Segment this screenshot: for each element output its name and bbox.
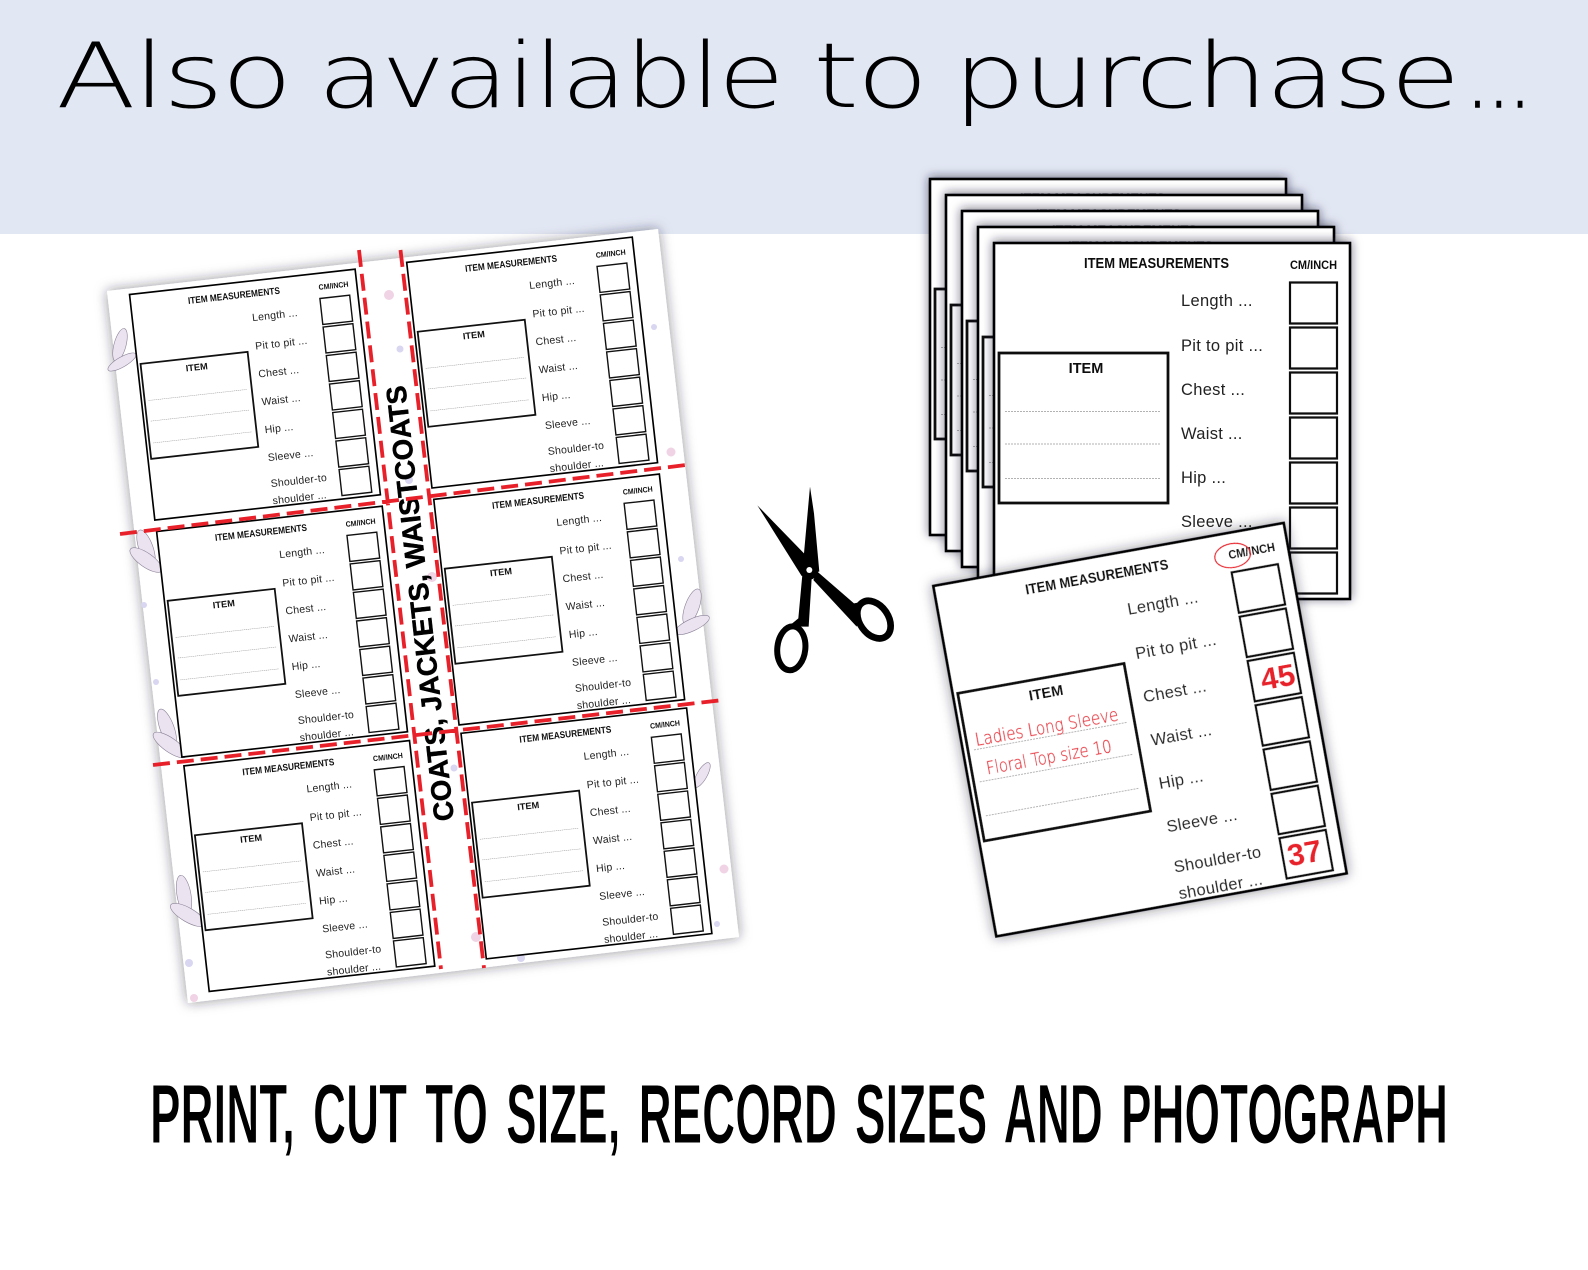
item box with handwriting: Ladies Long Sleeve [974, 705, 1120, 751]
unit heading circled in red [1213, 536, 1277, 571]
card 3: Length ... [279, 544, 325, 561]
card 5: Waist ... [315, 863, 356, 880]
card 1: ITEM MEASUREMENTS [187, 286, 281, 307]
card 3: shoulder ... [299, 726, 354, 744]
panel: printable sheet with six cards [106, 229, 739, 1003]
header band [0, 0, 1588, 234]
card 3 [157, 506, 408, 757]
red dashed cut lines [120, 250, 719, 969]
panel: stack of cards [930, 179, 1350, 599]
back card 4 [978, 227, 1334, 583]
value 45: 45 [1258, 657, 1298, 697]
card 6: Length ... [583, 746, 630, 763]
card 2: Length ... [529, 275, 575, 292]
card 2: CM/INCH [595, 248, 626, 260]
back card 1: ITEM MEASUREMENTS [1020, 190, 1165, 208]
card 3: Shoulder-to [297, 709, 355, 727]
card 4: ITEM [489, 566, 513, 578]
title: purchase [953, 24, 1458, 129]
title: ... [1466, 24, 1530, 129]
back card 1 [930, 179, 1286, 535]
back card 3 [962, 211, 1318, 567]
value 37: 37 [1284, 833, 1325, 873]
measurement labels: Hip ... [1157, 767, 1205, 793]
card 4: Length ... [556, 512, 603, 529]
card 4 [434, 474, 685, 725]
front stack card: Pit to pit ... [1181, 337, 1263, 355]
card 4: Waist ... [565, 597, 606, 613]
card 5: CM/INCH [373, 751, 403, 763]
card 1: Hip ... [264, 421, 294, 436]
card 3: CM/INCH [345, 517, 376, 529]
card 2: ITEM MEASUREMENTS [465, 254, 558, 275]
card 2: Hip ... [541, 389, 571, 404]
front stack card [994, 243, 1350, 599]
front stack card: Hip ... [1181, 469, 1226, 487]
card 3: ITEM MEASUREMENTS [215, 523, 308, 544]
card 2: Sleeve ... [544, 415, 591, 432]
card 5: Chest ... [312, 835, 354, 852]
unit heading circled in red: CM/INCH [1227, 540, 1276, 562]
back card 4: ITEM MEASUREMENTS [1068, 238, 1213, 256]
card 4: Sleeve ... [571, 652, 618, 669]
front stack card: ITEM MEASUREMENTS [1084, 255, 1229, 272]
measurement labels: Pit to pit ... [1134, 631, 1218, 663]
card 4: Pit to pit ... [559, 540, 612, 557]
front stack card: CM/INCH [1290, 258, 1337, 272]
card 6: Hip ... [596, 860, 626, 875]
card 6: Shoulder-to [602, 911, 659, 929]
title: Also [56, 24, 290, 129]
card 4: ITEM MEASUREMENTS [492, 491, 585, 512]
back card 2: ITEM MEASUREMENTS [1036, 206, 1181, 224]
panel: filled-in tilted card [933, 523, 1347, 936]
measurement labels: Shoulder-to [1172, 843, 1263, 877]
card 2: Chest ... [535, 332, 577, 348]
card 3: Waist ... [288, 629, 328, 645]
card 6: Waist ... [592, 831, 633, 847]
item box with handwriting [958, 663, 1151, 841]
card 4: shoulder ... [576, 694, 632, 712]
front stack card: Chest ... [1181, 381, 1245, 399]
card 5: Hip ... [318, 893, 348, 908]
card 4: Chest ... [562, 569, 604, 585]
card 1: shoulder ... [272, 489, 327, 507]
card 6: Sleeve ... [599, 886, 645, 903]
item box with handwriting: Floral Top size 10 [985, 737, 1113, 779]
card 6: Pit to pit ... [586, 774, 640, 791]
front stack card: Sleeve ... [1181, 513, 1253, 531]
card 6: CM/INCH [650, 718, 680, 731]
card 2: Pit to pit ... [532, 303, 585, 321]
measurement labels: Length ... [1126, 588, 1200, 619]
card heading: ITEM MEASUREMENTS [1024, 556, 1170, 599]
item box with handwriting: ITEM [1028, 683, 1065, 705]
card 5: Length ... [306, 778, 353, 795]
card 1 [130, 269, 380, 521]
card 2: shoulder ... [549, 457, 605, 475]
measurement boxes [1232, 564, 1333, 879]
card 6: ITEM [517, 800, 540, 812]
card 5: Shoulder-to [324, 943, 382, 962]
measurement labels: Waist ... [1150, 721, 1213, 750]
card 4: Shoulder-to [574, 677, 632, 695]
title: available [318, 24, 782, 129]
card 1: Chest ... [258, 364, 300, 381]
card 3: Hip ... [291, 658, 321, 673]
card 5 [184, 741, 435, 992]
card 6: ITEM MEASUREMENTS [519, 724, 612, 746]
card 2: Waist ... [538, 360, 579, 376]
measurement labels: Sleeve ... [1165, 806, 1239, 836]
back card 3: ITEM MEASUREMENTS [1052, 222, 1197, 240]
front stack card: ITEM [1069, 361, 1103, 377]
title [56, 24, 1530, 129]
card 4: CM/INCH [622, 485, 653, 497]
card 3: Chest ... [285, 601, 327, 617]
card 3: Sleeve ... [294, 684, 341, 701]
card 1: Shoulder-to [270, 472, 328, 490]
card 3: Pit to pit ... [282, 572, 335, 590]
card 1: Waist ... [261, 392, 301, 408]
card 1: CM/INCH [318, 280, 349, 292]
card 2: ITEM [462, 329, 486, 341]
measurement labels: shoulder ... [1177, 870, 1264, 903]
title: to [813, 24, 926, 129]
measurement labels [1126, 585, 1268, 903]
front stack card: Length ... [1181, 292, 1253, 310]
card 6 [461, 708, 712, 959]
card 5: Pit to pit ... [309, 806, 362, 824]
card 1: Length ... [251, 307, 298, 324]
card 1: Sleeve ... [267, 447, 314, 464]
card 6: Chest ... [589, 803, 631, 819]
card 4: Hip ... [568, 626, 598, 641]
card 5: ITEM [240, 833, 263, 845]
icon: scissors [757, 487, 898, 672]
card 1: Pit to pit ... [255, 335, 308, 353]
card 6: shoulder ... [604, 928, 659, 946]
back card 2 [946, 195, 1302, 551]
measurement labels: Chest ... [1142, 677, 1208, 706]
front stack card: Waist ... [1181, 425, 1243, 443]
card 2 [407, 237, 658, 488]
card 5: shoulder ... [326, 961, 382, 979]
card 5: Sleeve ... [322, 918, 368, 936]
card 1: ITEM [185, 361, 209, 374]
vertical label: COATS, JACKETS, WAISTCOATS [380, 384, 460, 823]
sheet decoration: dots and petals [106, 290, 728, 1002]
sheet paper [107, 229, 739, 1003]
card 3: ITEM [212, 598, 236, 611]
card 2: Shoulder-to [547, 440, 605, 458]
card 5: ITEM MEASUREMENTS [242, 757, 335, 778]
